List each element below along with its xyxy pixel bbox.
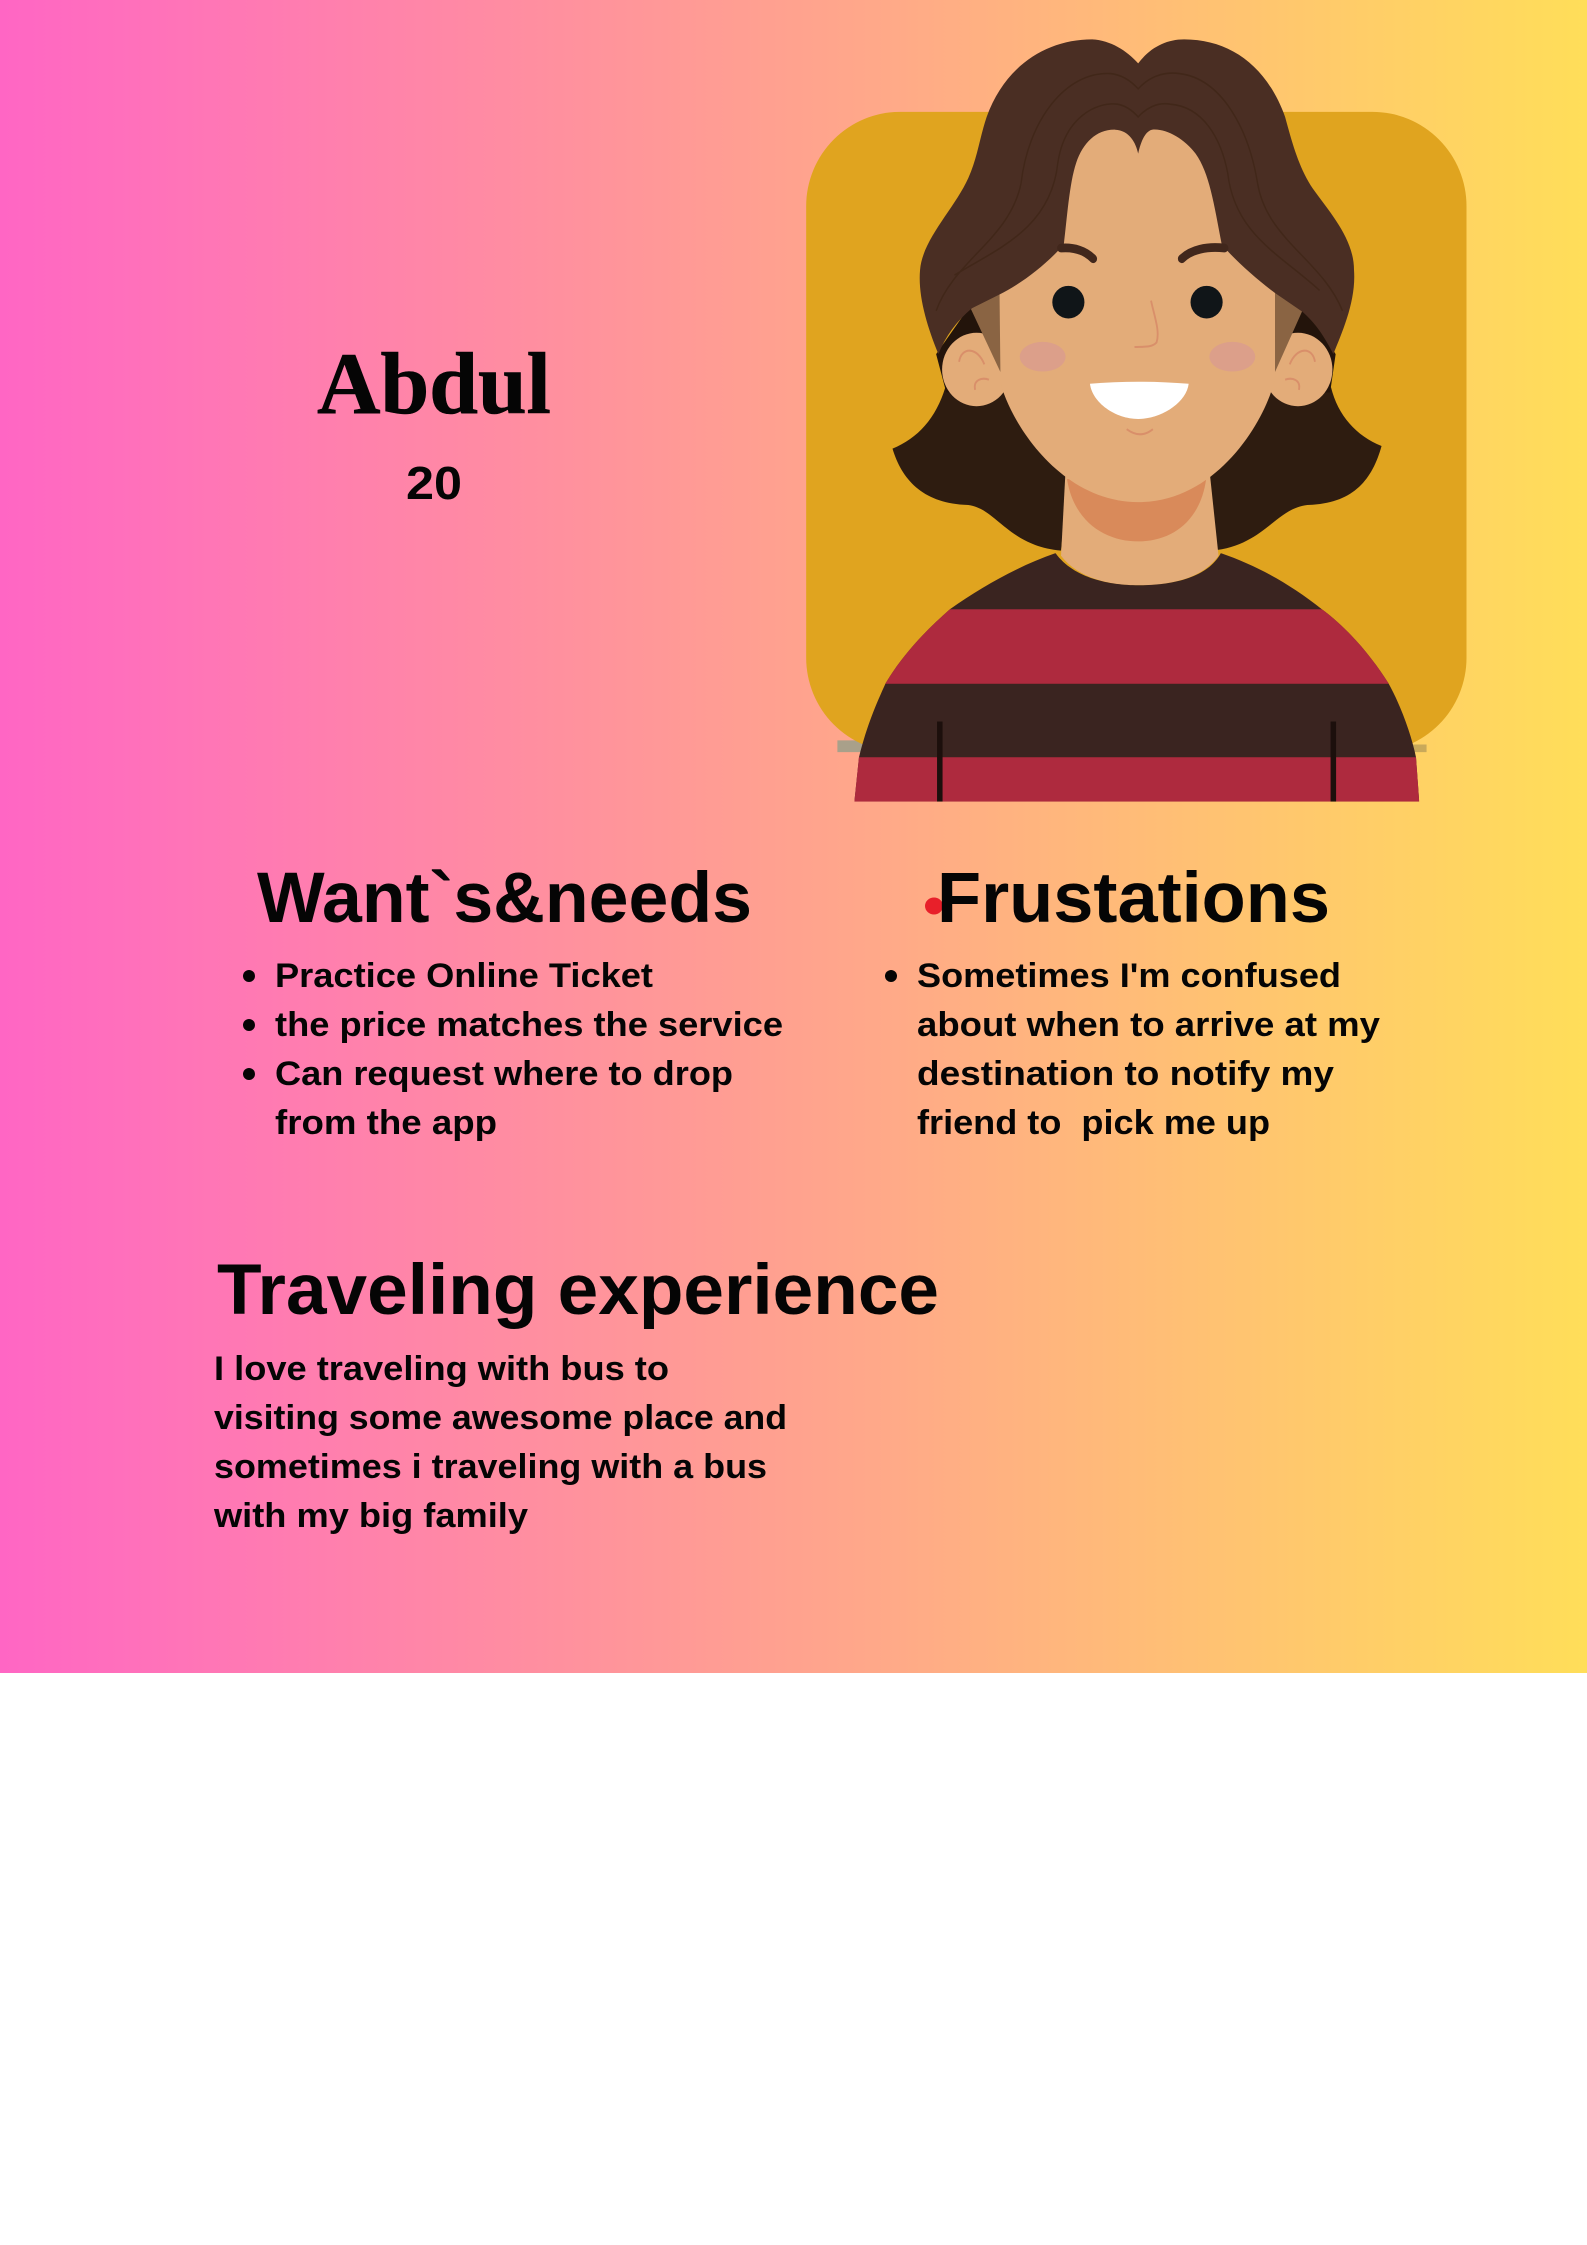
eyes — [1052, 286, 1223, 318]
name: Abdul — [317, 336, 551, 433]
age: 20 — [406, 457, 462, 509]
striped shirt — [849, 551, 1427, 806]
neck shadow — [1067, 479, 1206, 541]
neck — [1061, 469, 1219, 585]
eyebrows — [1061, 248, 1225, 259]
list: wants and needs: from the app — [275, 1104, 497, 1142]
paragraph: traveling experience: visiting some awesome place and — [214, 1399, 787, 1437]
heading: frustrations: Frustations — [937, 859, 1330, 938]
chin — [1127, 429, 1153, 434]
paragraph: traveling experience: with my big family — [213, 1497, 528, 1535]
list: wants and needs: Can request where to drop — [275, 1055, 733, 1093]
backdrop corner slivers — [837, 740, 872, 752]
list: frustrations — [885, 957, 1380, 1142]
upper hair — [920, 39, 1354, 354]
ear details — [959, 351, 1315, 390]
sideburns — [971, 290, 1303, 372]
lower hair — [893, 387, 1382, 551]
list: wants and needs — [243, 957, 783, 1142]
paragraph: traveling experience: I love traveling with bus to — [214, 1350, 669, 1388]
list: frustrations: about when to arrive at my — [917, 1006, 1380, 1044]
heading: wants and needs: Want`s&needs — [257, 859, 752, 938]
cheeks — [1020, 342, 1255, 372]
nose — [1135, 301, 1158, 347]
ears — [942, 333, 1332, 406]
heading: traveling experience: Traveling experience — [217, 1251, 939, 1330]
paragraph: traveling experience: sometimes i traveling with a bus — [214, 1448, 767, 1486]
list: wants and needs: the price matches the service — [275, 1006, 783, 1044]
list: frustrations: friend to pick me up — [917, 1104, 1270, 1142]
dark hair above ears — [936, 303, 1336, 392]
smile — [1090, 382, 1189, 419]
gradient background panel — [0, 0, 1587, 1673]
list: frustrations: Sometimes I'm confused — [917, 957, 1341, 995]
avatar backdrop tile — [806, 112, 1467, 752]
hair lines — [936, 73, 1343, 311]
face — [999, 122, 1275, 502]
list: wants and needs: Practice Online Ticket — [275, 957, 653, 995]
paragraph: traveling experience — [213, 1350, 787, 1535]
avatar portrait — [806, 39, 1467, 806]
red dot — [925, 898, 943, 914]
list: frustrations: destination to notify my — [917, 1055, 1334, 1093]
